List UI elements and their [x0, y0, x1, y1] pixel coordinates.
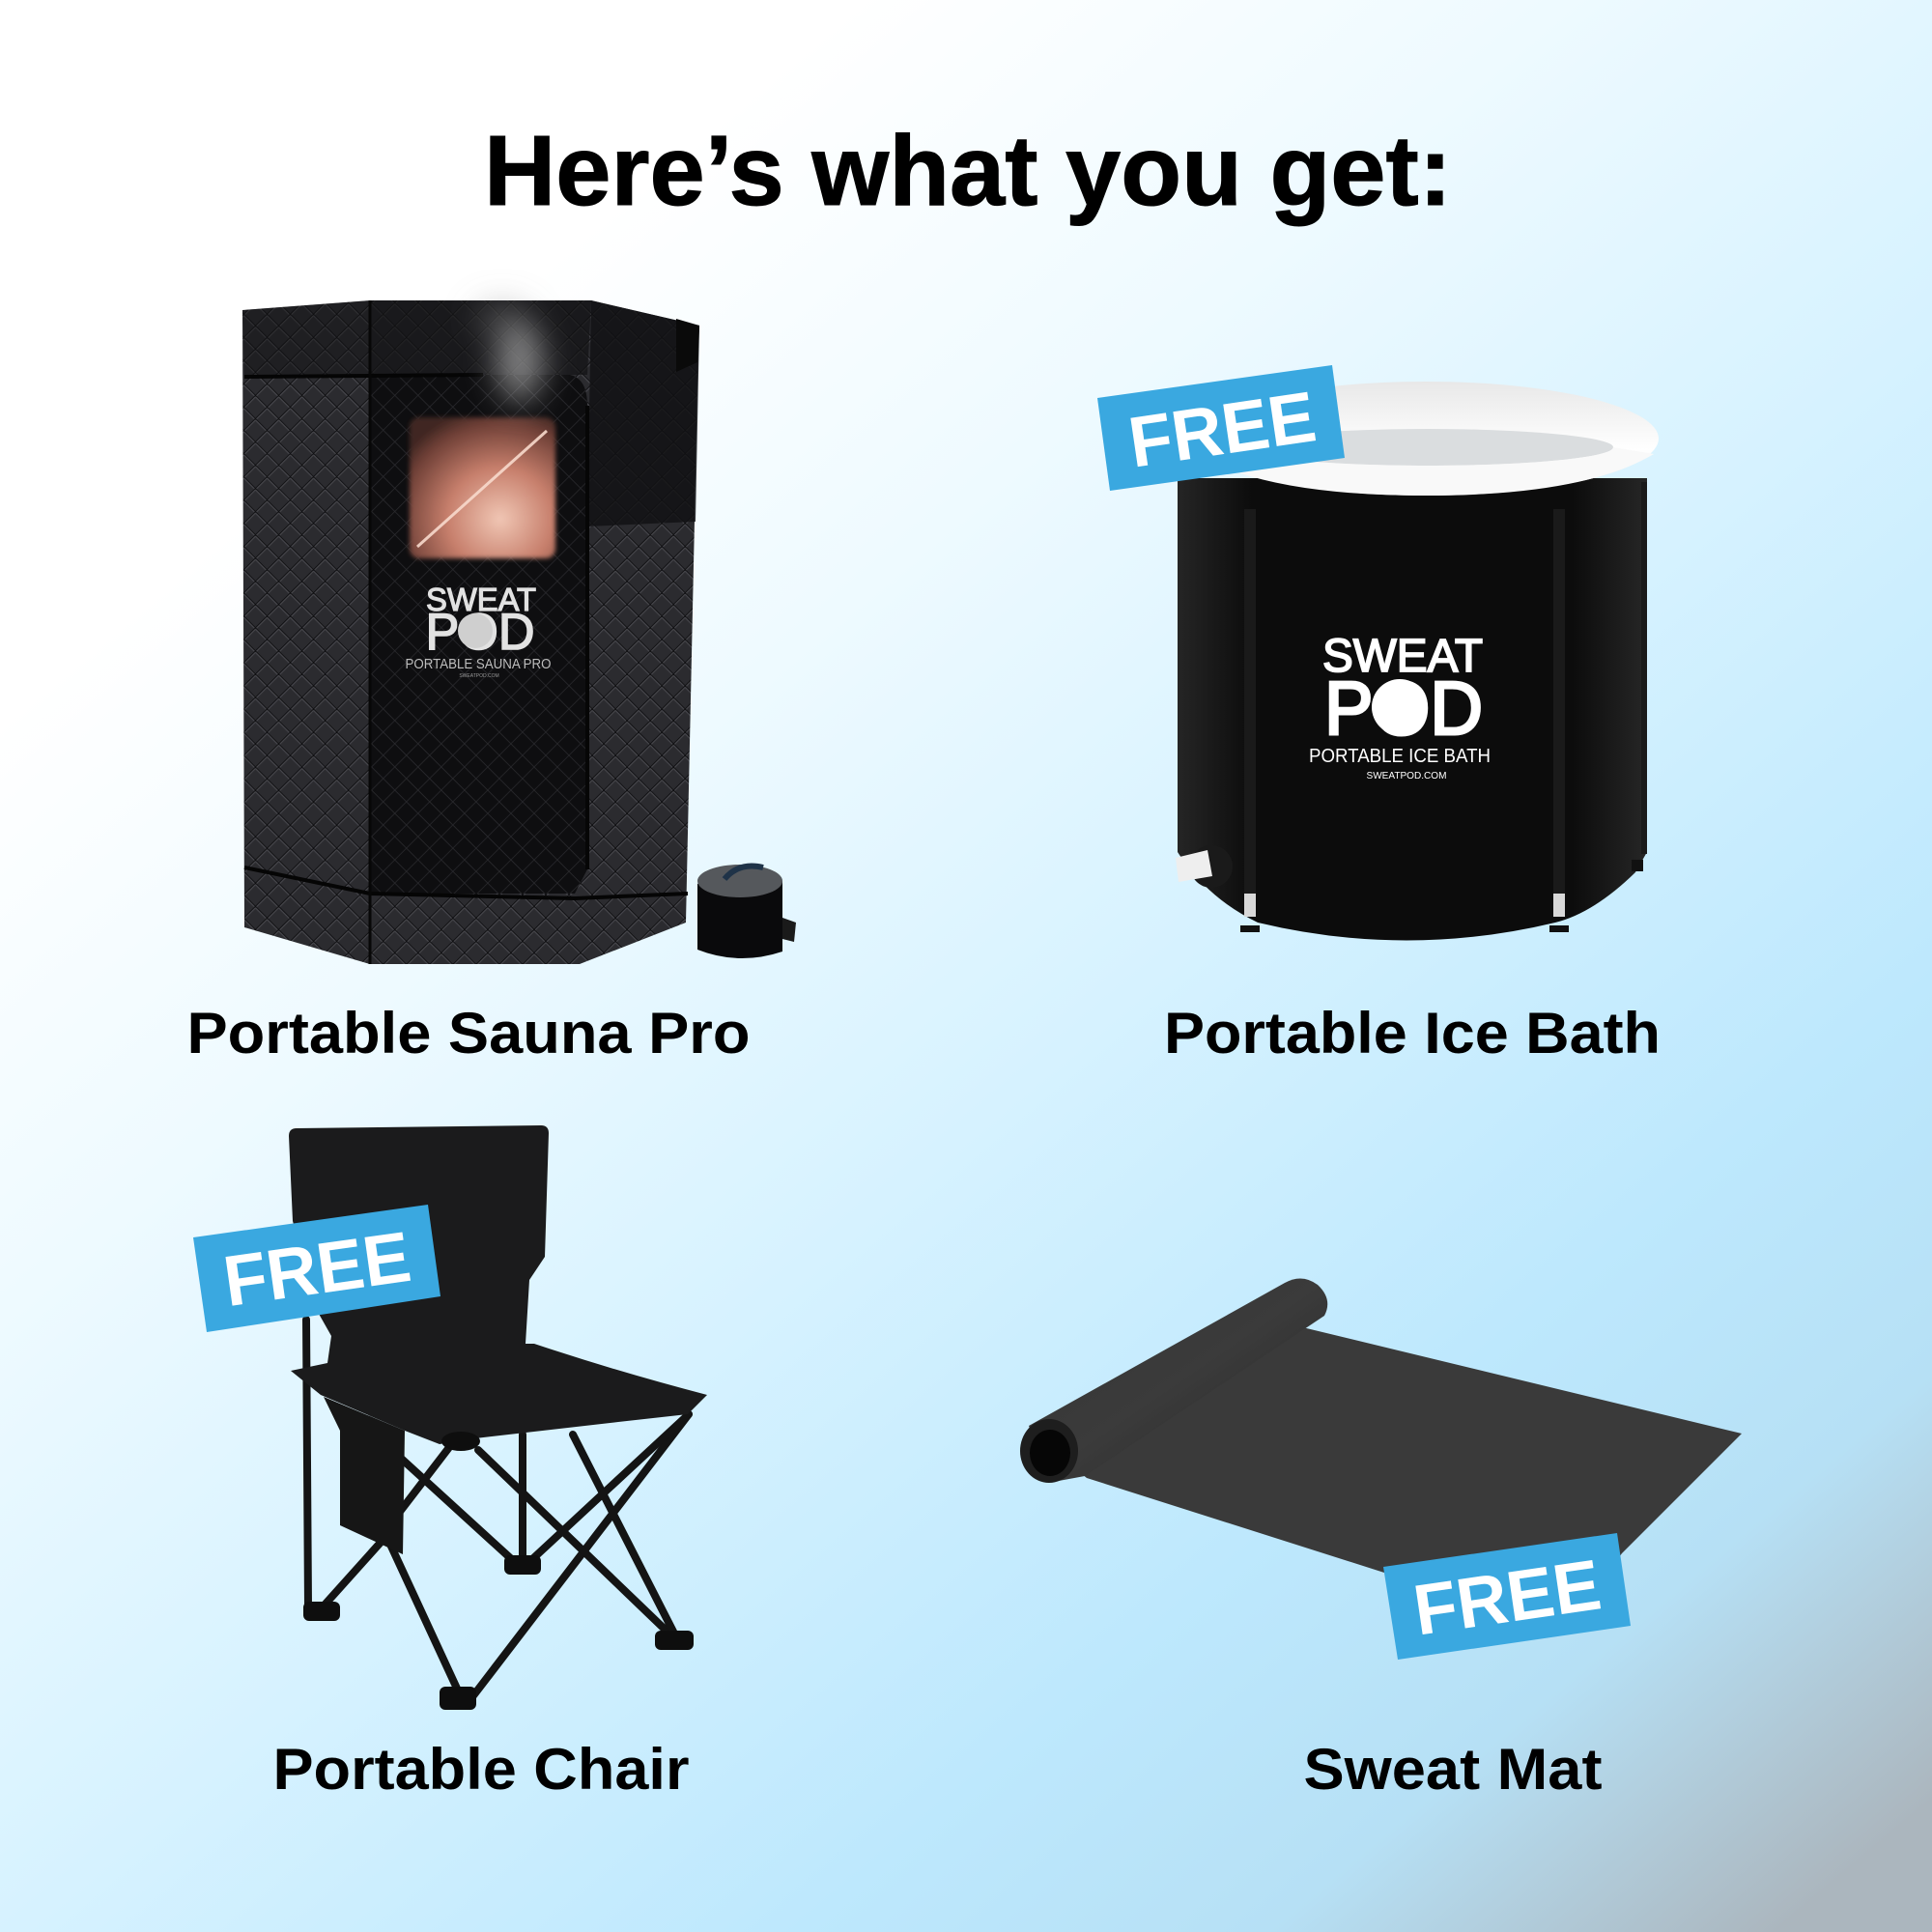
chair back and seat — [289, 1125, 707, 1444]
label: portable ice bath: Portable Ice Bath — [1164, 1001, 1661, 1065]
product: portable ice bath — [1176, 382, 1659, 941]
badge: free (chair): FREE — [218, 1216, 415, 1321]
inflatable ring — [1193, 382, 1659, 496]
label: sweat mat: Sweat Mat — [1304, 1737, 1603, 1802]
sauna window — [410, 417, 555, 558]
product: sweat mat — [1020, 1278, 1742, 1604]
badge: free (mat): FREE — [1408, 1544, 1605, 1651]
sauna logo: PORTABLE SAUNA PRO — [406, 657, 551, 672]
badge: free (ice bath) — [1097, 365, 1345, 491]
mat roll end — [1020, 1419, 1078, 1483]
sauna logo: POD — [425, 604, 535, 661]
ice bath logo: PORTABLE ICE BATH — [1309, 746, 1491, 767]
ice bath logo — [1309, 631, 1491, 781]
chair side pocket — [324, 1397, 405, 1554]
ice bath logo: SWEATPOD.COM — [1366, 770, 1447, 781]
badge: free (ice bath): FREE — [1123, 376, 1321, 483]
steam — [473, 301, 543, 403]
ice bath logo: SWEAT — [1322, 631, 1483, 682]
steam generator — [697, 865, 796, 958]
sauna logo — [406, 582, 551, 679]
sauna tent body — [242, 300, 699, 964]
chair frame legs — [306, 1320, 689, 1698]
product: portable sauna pro — [242, 300, 796, 964]
chair feet — [303, 1432, 694, 1710]
sauna logo: SWEATPOD.COM — [459, 673, 499, 679]
ice bath body — [1178, 478, 1647, 941]
drain valve — [1176, 845, 1233, 888]
ice bath frame poles — [1240, 482, 1647, 932]
mat sheet — [1063, 1325, 1742, 1604]
badge: free (chair) — [193, 1205, 440, 1332]
product: portable chair — [289, 1125, 707, 1710]
label: portable sauna pro: Portable Sauna Pro — [187, 1001, 750, 1065]
label: portable chair: Portable Chair — [272, 1737, 690, 1802]
ice bath logo: POD — [1324, 666, 1483, 751]
sauna logo: SWEAT — [426, 582, 536, 617]
badge: free (mat) — [1383, 1533, 1631, 1660]
mat roll — [1029, 1278, 1327, 1483]
title: Here’s what you get: — [484, 115, 1452, 226]
